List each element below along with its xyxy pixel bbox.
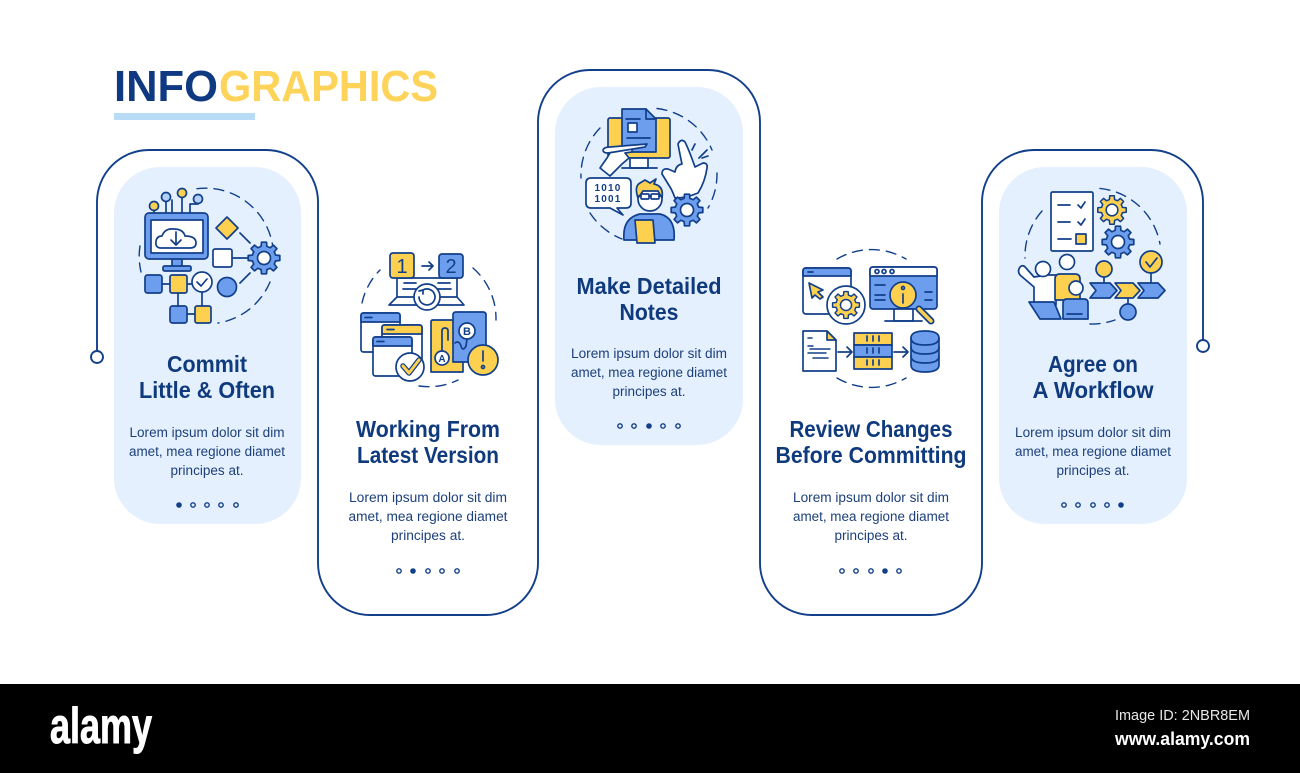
title: INFO: [114, 62, 218, 111]
heading: Notes: [620, 299, 678, 325]
panel: make detailed notes: [555, 87, 743, 445]
icon: developer and notes: [581, 108, 717, 243]
body text: [1015, 425, 1171, 478]
icon: developer and notes: 1001: [594, 194, 622, 205]
pagination dots: [397, 568, 459, 574]
heading: [356, 416, 500, 468]
body text: principes at.: [834, 528, 908, 543]
heading: A Workflow: [1032, 377, 1154, 403]
icon: monitor and flowchart: [139, 188, 280, 323]
connecting outline: [91, 70, 1209, 615]
heading: Latest Version: [357, 442, 499, 468]
body text: amet, mea regione diamet: [1015, 444, 1171, 459]
body text: principes at.: [170, 463, 244, 478]
panel: review changes before committing: [776, 250, 966, 574]
title: GRAPHICS: [219, 62, 438, 111]
pagination dots: [840, 568, 901, 574]
panel: working from latest version: [348, 253, 508, 574]
body text: amet, mea regione diamet: [348, 509, 508, 524]
body text: principes at.: [612, 384, 686, 399]
title: [114, 62, 438, 111]
pagination dots: [618, 423, 680, 429]
heading: [576, 273, 722, 325]
body text: [348, 490, 508, 543]
icon: developer and notes: 1010: [594, 183, 622, 194]
heading: [776, 416, 966, 468]
heading: Commit: [167, 351, 247, 377]
body text: principes at.: [1056, 463, 1130, 478]
body text: Lorem ipsum dolor sit dim: [571, 346, 727, 361]
heading: Agree on: [1048, 351, 1138, 377]
footer logo: alamy: [50, 698, 152, 754]
icon: versions and laptop: [361, 253, 498, 387]
body text: [793, 490, 949, 543]
body text: Lorem ipsum dolor sit dim: [130, 425, 284, 440]
panel: commit little and often: [114, 167, 301, 524]
heading: [139, 351, 275, 403]
heading: [1032, 351, 1154, 403]
website: www.alamy.com: [1114, 729, 1250, 749]
body text: Lorem ipsum dolor sit dim: [349, 490, 507, 505]
icon: windows and database: [803, 250, 939, 387]
title underline: [114, 113, 255, 120]
heading: Make Detailed: [576, 273, 722, 299]
pagination dots: [176, 502, 238, 508]
body text: Lorem ipsum dolor sit dim: [793, 490, 949, 505]
footer bar: [0, 684, 1300, 773]
panel: agree on a workflow: [999, 167, 1187, 524]
body text: [129, 425, 285, 478]
icon: team and workflow: [1018, 188, 1165, 324]
image id: Image ID: 2NBR8EM: [1115, 707, 1250, 724]
body text: amet, mea regione diamet: [793, 509, 949, 524]
icon: versions and laptop: 1: [396, 256, 408, 278]
heading: Little & Often: [139, 377, 275, 403]
body text: amet, mea regione diamet: [129, 444, 285, 459]
heading: Review Changes: [790, 416, 952, 442]
body text: [571, 346, 727, 399]
pagination dots: [1062, 502, 1124, 508]
icon: versions and laptop: 2: [445, 256, 457, 278]
heading: Working From: [356, 416, 500, 442]
body text: amet, mea regione diamet: [571, 365, 727, 380]
heading: Before Committing: [776, 442, 966, 468]
body text: principes at.: [391, 528, 465, 543]
body text: Lorem ipsum dolor sit dim: [1015, 425, 1171, 440]
icon: versions and laptop: B: [463, 326, 471, 338]
icon: versions and laptop: A: [438, 354, 446, 365]
